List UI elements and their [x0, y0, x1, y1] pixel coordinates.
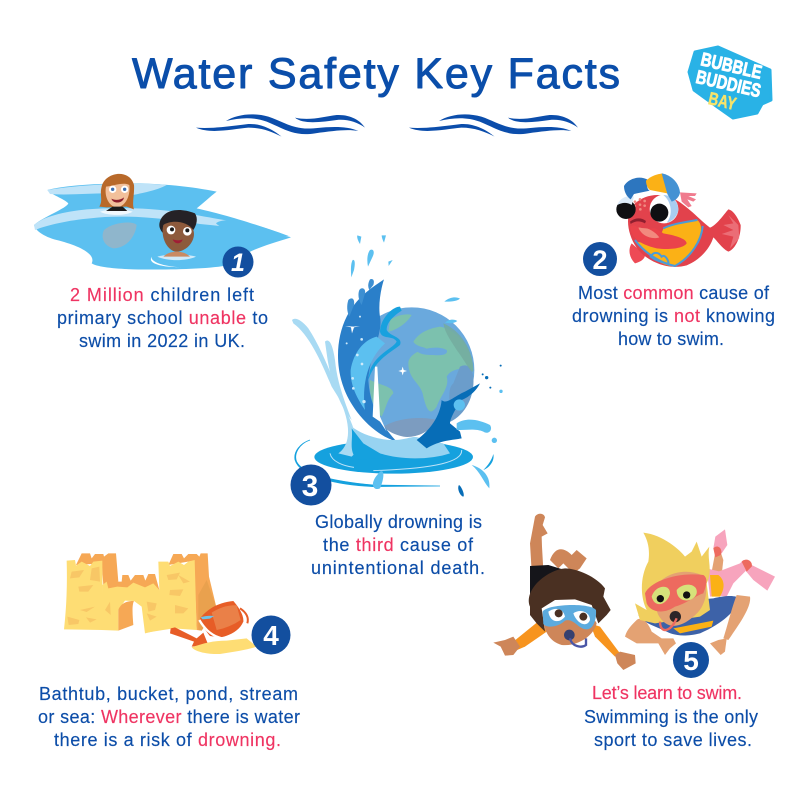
logo: Bubble Buddies Bay: BUBBLE	[699, 49, 764, 84]
illustration: fish with cap	[616, 173, 741, 267]
text: fact 5: Swimming is the only	[584, 707, 758, 727]
badge 1	[222, 246, 254, 278]
illustration: children swimming in pool	[34, 174, 291, 270]
text: fact 5: sport to save lives.	[594, 730, 752, 750]
text: fact 4	[38, 684, 300, 750]
text: fact 3: the third cause of	[323, 535, 474, 555]
logo: Bubble Buddies Bay: BUDDIES	[694, 67, 763, 102]
text: fact 3: Globally drowning is	[315, 512, 482, 532]
text: fact 3: unintentional death.	[311, 558, 485, 578]
text: fact 2: Most common cause of	[578, 283, 770, 303]
badge 4: 4	[263, 620, 279, 651]
text: fact 1	[57, 285, 268, 351]
illustration: sandcastle with bucket	[64, 553, 257, 654]
text: fact 3	[311, 512, 485, 578]
text: fact 1: primary school unable to	[57, 308, 268, 328]
decorative wave left	[196, 114, 365, 137]
illustration: globe with water splash	[292, 235, 503, 497]
text: fact 4: or sea: Wherever there is water	[38, 707, 300, 727]
badge 4	[252, 616, 290, 654]
decorative wave right	[409, 114, 578, 137]
badge 2	[583, 242, 617, 276]
logo: Bubble Buddies Bay: BAY	[706, 88, 738, 114]
illustration: two children snorkelling	[493, 514, 775, 670]
badge 5	[673, 642, 709, 678]
badge 3	[290, 464, 332, 506]
text: fact 5	[584, 683, 758, 750]
text: fact 5: Let’s learn to swim.	[592, 683, 742, 703]
badge 1: 1	[231, 249, 245, 277]
badge 3: 3	[302, 470, 318, 503]
text: fact 1: 2 Million children left	[70, 285, 254, 305]
text: fact 2: how to swim.	[618, 329, 724, 349]
text: fact 1: swim in 2022 in UK.	[79, 331, 245, 351]
logo: Bubble Buddies Bay	[689, 47, 771, 118]
badge 5: 5	[683, 645, 699, 676]
text: fact 2	[572, 283, 775, 349]
title: Water Safety Key Facts	[132, 50, 620, 98]
text: fact 2: drowning is not knowing	[572, 306, 775, 326]
badge 2: 2	[592, 245, 608, 275]
text: fact 4: there is a risk of drowning.	[54, 730, 281, 750]
text: fact 4: Bathtub, bucket, pond, stream	[39, 684, 298, 704]
